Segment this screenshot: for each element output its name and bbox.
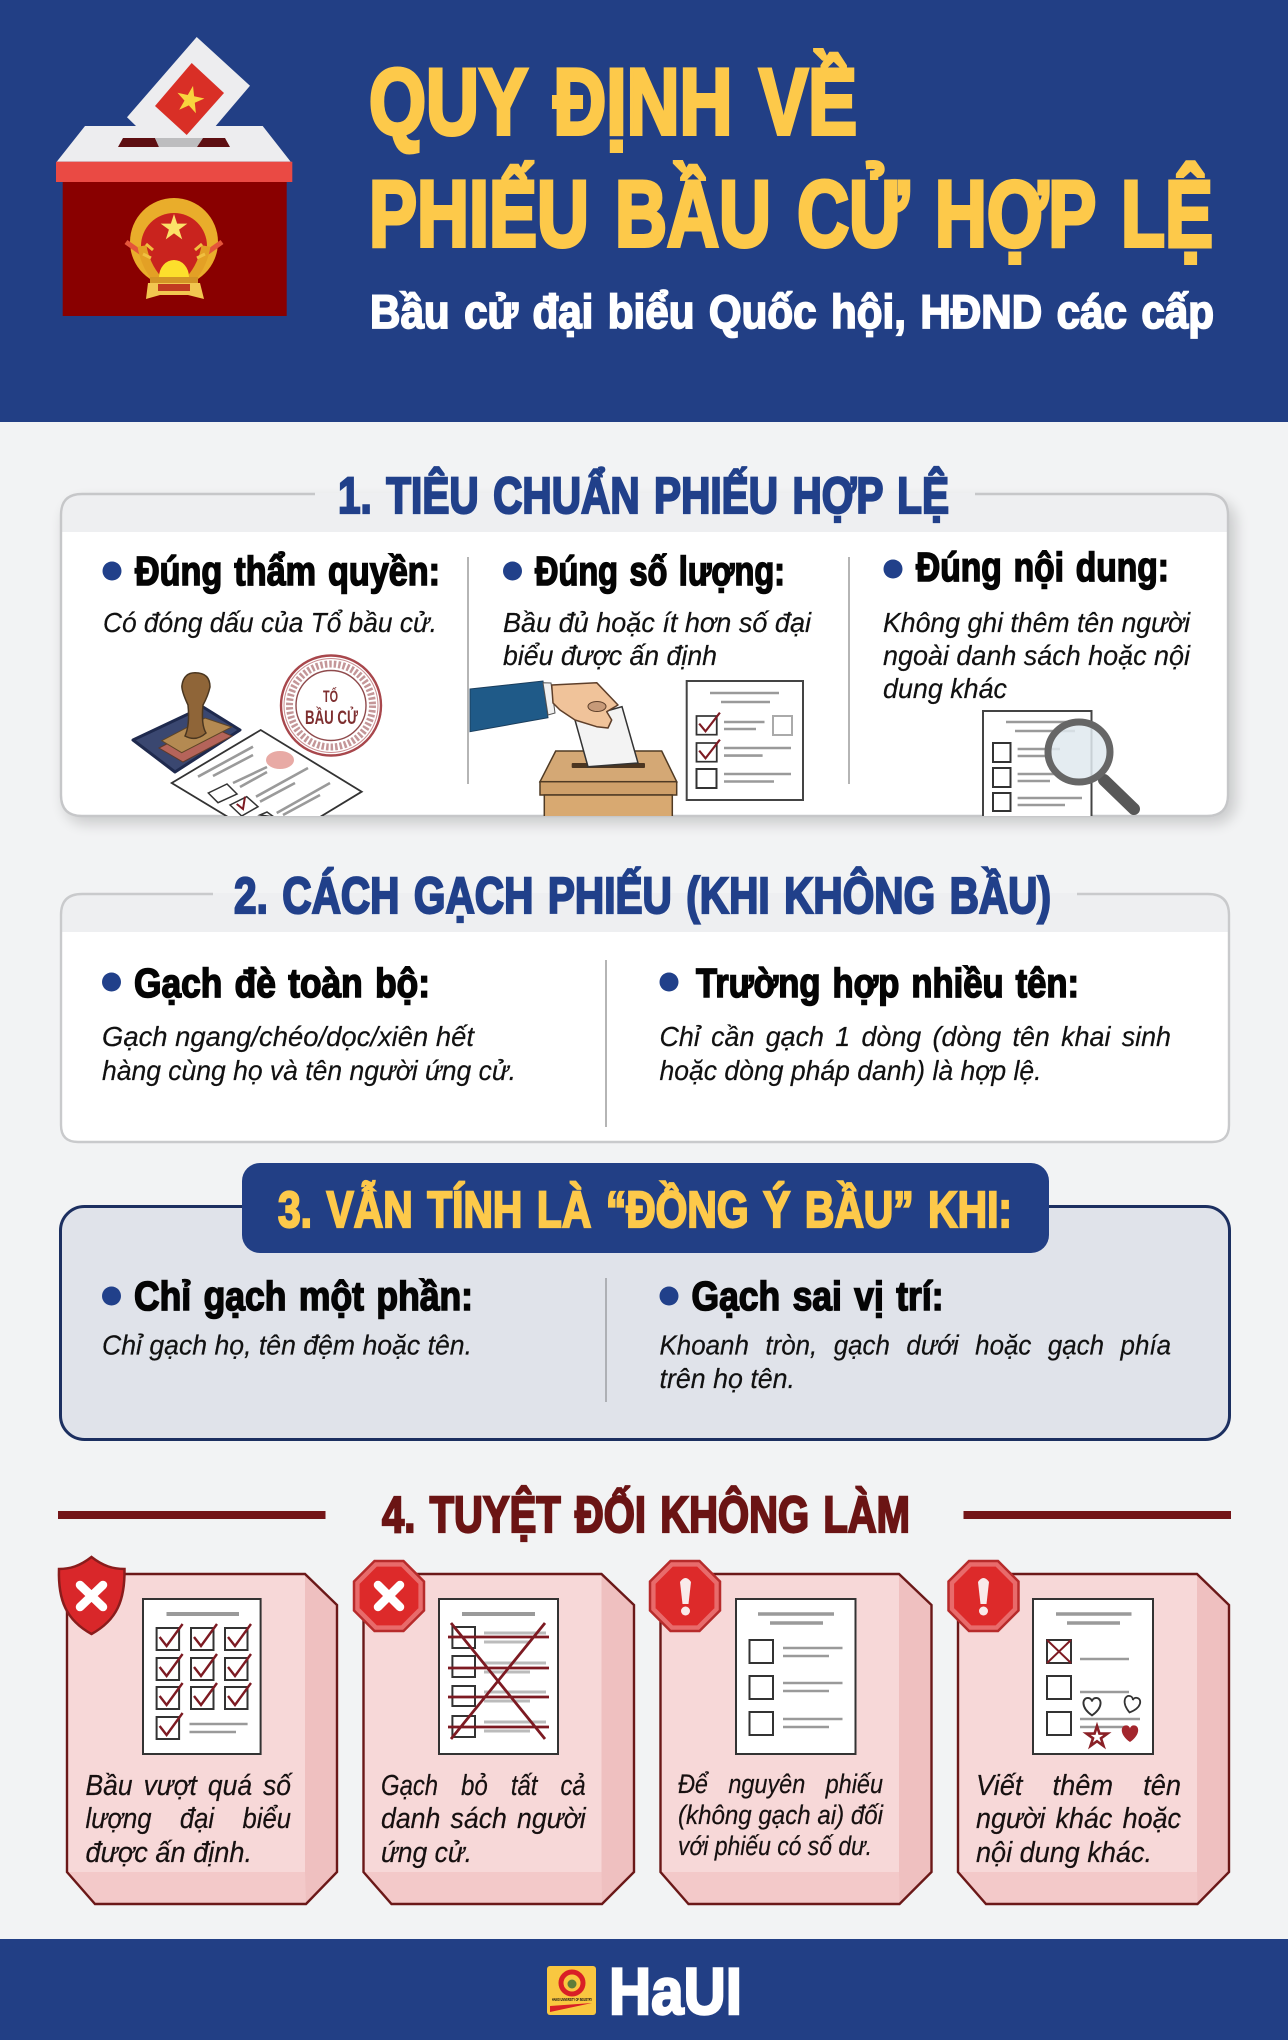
- column: đúng số lượng: Đúng số lượng:: [535, 548, 785, 594]
- column: gạch sai vị trí: [660, 1273, 1171, 1394]
- title: QUY ĐỊNH VỀ: [369, 49, 857, 154]
- icon: document with magnifier: [983, 711, 1134, 831]
- column: đúng số lượng: Bầu đủ hoặc ít hơn số đại: [503, 607, 812, 638]
- caption: Gạch bỏ tất cả: [381, 1770, 586, 1802]
- panel: section 3: [60, 1163, 1230, 1440]
- column: gạch sai vị trí: trên họ tên.: [660, 1363, 795, 1394]
- column: đúng số lượng: biểu được ấn định: [503, 640, 717, 671]
- icon: round stamp: BẦU CỬ: [305, 707, 358, 729]
- divider: [467, 557, 469, 784]
- column: gạch đè toàn bộ: Gạch ngang/chéo/dọc/xiên hết: [102, 1021, 475, 1052]
- icon: ballot box: [56, 37, 292, 316]
- icon: round stamp: [281, 656, 381, 756]
- card: gạch bỏ tất cả: [354, 1561, 634, 1904]
- section 4 heading: 4. TUYỆT ĐỐI KHÔNG LÀM: [382, 1485, 910, 1543]
- column: trường hợp nhiều tên: hoặc dòng pháp danh) là hợp lệ.: [660, 1055, 1042, 1086]
- column: đúng thẩm quyền: [102, 548, 440, 638]
- icon: ballot with doodles: [1033, 1599, 1153, 1754]
- column: chỉ gạch một phần: [102, 1273, 473, 1360]
- icon: checked ballot: [687, 681, 803, 800]
- column: đúng nội dung: Không ghi thêm tên người: [883, 607, 1191, 638]
- icon: HaUI logo: HANOI UNIVERSITY OF INDUSTRY: [552, 1997, 592, 2002]
- panel: section 1: [60, 466, 1236, 831]
- heading: section 2: 2. CÁCH GẠCH PHIẾU (KHI KHÔNG BẦU): [234, 866, 1051, 924]
- divider: [848, 557, 850, 784]
- caption: Viết thêm tên: [976, 1770, 1181, 1802]
- icon: stop sign with cross: [354, 1561, 424, 1631]
- icon: ballot crossed out: [439, 1599, 558, 1754]
- column: đúng nội dung: dung khác: [883, 673, 1007, 704]
- column: gạch đè toàn bộ: Gạch đè toàn bộ:: [134, 960, 430, 1006]
- icon: shield with cross: [59, 1557, 125, 1634]
- icon: stamp and ballot: [133, 673, 362, 817]
- column: trường hợp nhiều tên: Trường hợp nhiều tên:: [696, 960, 1079, 1006]
- column: chỉ gạch một phần: Chỉ gạch một phần:: [134, 1273, 473, 1319]
- caption: với phiếu có số dư.: [678, 1831, 872, 1861]
- icon: warning sign: [948, 1561, 1018, 1631]
- column: gạch đè toàn bộ: hàng cùng họ và tên người ứng cử.: [102, 1055, 516, 1086]
- icon: warning sign: [650, 1561, 720, 1631]
- footer: [0, 1939, 1288, 2040]
- column: gạch sai vị trí: Khoanh tròn, gạch dưới hoặc gạch phía: [660, 1330, 1171, 1360]
- subtitle: Bầu cử đại biểu Quốc hội, HĐND các cấp: [370, 285, 1214, 338]
- icon: blank ballot: [736, 1599, 856, 1754]
- caption: được ấn định.: [86, 1837, 252, 1869]
- column: chỉ gạch một phần: Chỉ gạch họ, tên đệm hoặc tên.: [102, 1330, 472, 1360]
- title: [369, 49, 1213, 266]
- panel: section 2: [60, 866, 1230, 1143]
- caption: ứng cử.: [381, 1837, 472, 1869]
- column: đúng thẩm quyền: Có đóng dấu của Tổ bầu cử.: [103, 607, 437, 638]
- heading pill: section 3: [242, 1163, 1049, 1253]
- column: đúng nội dung: ngoài danh sách hoặc nội: [883, 640, 1191, 671]
- heading pill: section 3: 3. VẪN TÍNH LÀ “ĐỒNG Ý BẦU” KHI:: [278, 1180, 1012, 1238]
- caption: Để nguyên phiếu: [678, 1769, 883, 1799]
- caption: [86, 1770, 294, 1869]
- caption: lượng đại biểu: [86, 1803, 291, 1835]
- column: đúng số lượng: [503, 548, 812, 671]
- column: đúng nội dung: [883, 544, 1191, 704]
- column: đúng thẩm quyền: Đúng thẩm quyền:: [135, 548, 440, 594]
- header banner: [0, 0, 1288, 422]
- column: gạch đè toàn bộ: [102, 960, 516, 1086]
- heading: section 1: 1. TIÊU CHUẨN PHIẾU HỢP LỆ: [338, 466, 949, 524]
- icon: ballot over-selected: [143, 1599, 261, 1754]
- caption: Bầu vượt quá số: [86, 1770, 294, 1802]
- card: viết thêm tên: [948, 1561, 1229, 1904]
- icon: HaUI logo: [547, 1966, 596, 2015]
- caption: [678, 1769, 884, 1861]
- caption: danh sách người: [381, 1803, 587, 1835]
- column: gạch sai vị trí: Gạch sai vị trí:: [692, 1273, 944, 1319]
- card: vượt quá số lượng: [59, 1557, 337, 1904]
- card: để nguyên phiếu: [650, 1561, 932, 1904]
- caption: nội dung khác.: [976, 1837, 1152, 1869]
- wordmark: HaUI: [609, 1954, 742, 2028]
- column: trường hợp nhiều tên: Chỉ cần gạch 1 dòng (dòng tên khai sinh: [660, 1021, 1171, 1052]
- divider: [605, 1278, 607, 1402]
- caption: [381, 1770, 587, 1869]
- section 4 heading: [58, 1485, 1231, 1543]
- icon: round stamp: TỐ: [323, 686, 338, 706]
- column: đúng nội dung: Đúng nội dung:: [916, 544, 1169, 590]
- icon: ballot box with hand: [470, 681, 677, 821]
- caption: người khác hoặc: [976, 1803, 1181, 1835]
- caption: [976, 1770, 1181, 1869]
- divider: [605, 960, 607, 1127]
- column: trường hợp nhiều tên: [660, 960, 1171, 1086]
- icon: national emblem: [126, 198, 222, 299]
- caption: (không gạch ai) đối: [678, 1800, 884, 1830]
